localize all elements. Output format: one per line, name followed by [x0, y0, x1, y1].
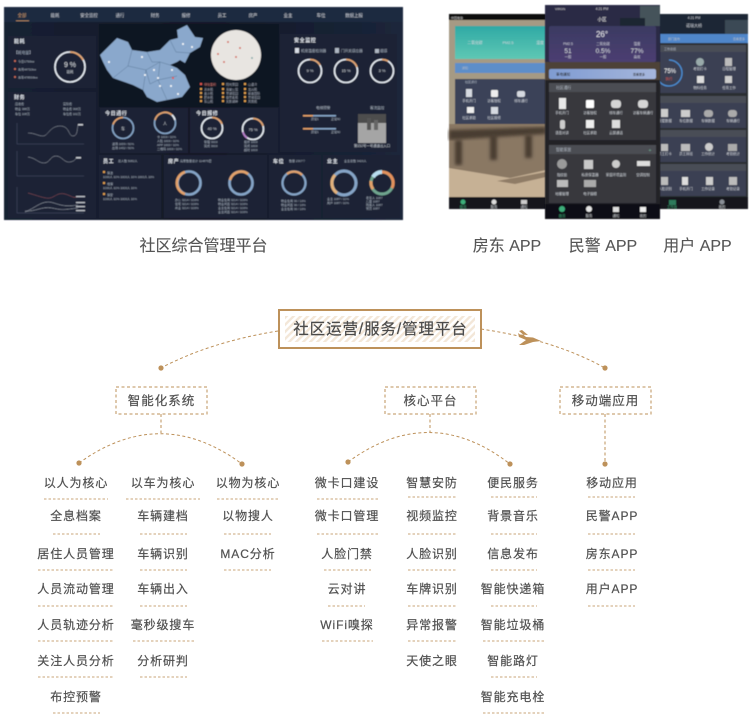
panel: safety monitoring: 3 % [379, 68, 386, 73]
panel: today's repairs: 完成 3000 [204, 143, 218, 148]
panel: property: 物业闲置 3214 / 100% [218, 201, 248, 206]
records card: 手机开门 [679, 186, 693, 191]
map legend: 阳光家园 [226, 82, 238, 86]
panel: owners: 残疾人 1087 [366, 202, 383, 207]
community access panel: 手机开门 [555, 110, 569, 115]
panel: property: 住宅 3214 / 100% [175, 201, 199, 206]
category: core platform: 核心平台 [403, 393, 458, 408]
column: resident services: 智能充电栓 [481, 689, 545, 704]
panel: safety monitoring: 机房温度检测器 [301, 48, 327, 53]
white circular mini map [211, 30, 261, 80]
service card: 考勤统计 [726, 151, 740, 156]
smart home panel: 电子猫眼 [583, 191, 597, 196]
work card with progress ring: 任务工作 [722, 85, 736, 90]
connector: core platform branches [345, 414, 513, 467]
panel: property: 物业在用 3214 / 100% [218, 197, 248, 202]
captions: apps: 民警 APP [569, 237, 637, 255]
column: people-centred: 人员轨迹分析 [37, 618, 115, 632]
panel: safety monitoring: 9 % [307, 68, 314, 73]
panel: staff: 1000人 10% 1000人 10% [103, 186, 137, 190]
panel: today's traffic [100, 108, 188, 153]
panel: owners: 业主总数 3420人 [344, 158, 367, 163]
weather card: 77% [630, 48, 644, 55]
phone: user app [655, 14, 748, 209]
panel: finance with three line charts: 车位 108万 [15, 111, 30, 116]
panel: property: 商业 3214 / 100% [175, 205, 199, 210]
bottom navigation: 我的 [640, 213, 647, 218]
map legend: 东山苑 [204, 98, 213, 104]
bottom navigation [449, 197, 546, 209]
weather card [549, 26, 656, 62]
staff card: 车辆数据 [701, 118, 715, 123]
blue notice bar [660, 34, 748, 43]
bottom navigation: 通知 [613, 213, 620, 218]
navigation tabs: 房产 [249, 12, 258, 19]
staff card: 房屋数据 [658, 118, 672, 123]
map legend: 山语湾 [248, 82, 257, 86]
weather card: 26° [596, 30, 608, 39]
bottom navigation: 服务 [586, 213, 593, 218]
community access panel: 绑车通行 [609, 110, 623, 115]
community access panel [549, 83, 656, 140]
column: vehicle-centred: 车辆出入 [137, 581, 189, 596]
panel: today's traffic: 进场 1659 / 50% [112, 141, 134, 146]
weather card: 51 [564, 48, 572, 55]
column: micro checkpoint: WiFi嗅探 [320, 618, 374, 632]
staff card: 车辆通行 [726, 118, 740, 123]
staff card: 车位数据 [679, 118, 693, 123]
panel: today's traffic: 今日通行 [105, 110, 127, 117]
phone: user app: 4:21 PM [688, 16, 700, 20]
alert notice bar: 事电通知 [556, 72, 571, 76]
bottom navigation: 通知 [521, 204, 528, 209]
panel: owners: 业主 1087 / 10% [327, 196, 349, 201]
panel: parking: 物业闲置 30 / 10% [281, 202, 306, 207]
panel: finance with three line charts: 财务 [14, 94, 25, 101]
weather card: PM2.5 [563, 42, 573, 46]
map legend: 绿化面积 [204, 82, 216, 86]
panel: safety monitoring: 异常1 [311, 129, 319, 134]
column: people-centred: 居住人员管理 [37, 546, 115, 561]
smart home panel: 私房保温器 [582, 172, 599, 177]
column: smart security: 天使之眼 [406, 653, 458, 668]
panel: owners [323, 155, 400, 218]
panel: energy: 本月44710kw [18, 66, 37, 72]
panel: today's traffic: 人 [163, 121, 167, 126]
column: vehicle-centred [126, 475, 200, 677]
map legend: 翠湖花园 [226, 90, 238, 96]
panel: owners: 儿童 1087 [366, 198, 380, 204]
interior photo [449, 124, 546, 198]
records card: 工作记录 [701, 186, 715, 191]
column: resident services: 智能垃圾桶 [481, 617, 545, 632]
column: object-centred: MAC分析 [220, 547, 276, 561]
community access panel: 语音对讲 [555, 130, 569, 135]
bottom navigation: 工作台 [667, 204, 678, 209]
captions: apps [473, 237, 732, 255]
panel: today's repairs: 超时 1000 [244, 147, 258, 152]
column: object-centred: 以物为核心 [216, 476, 280, 490]
column: smart security: 车牌识别 [406, 581, 458, 596]
panel: staff: 保安 [107, 192, 113, 197]
bottom navigation: 首页 [460, 204, 467, 209]
work card with progress ring: 考勤打卡 [693, 66, 707, 71]
panel: parking: 车位 [273, 158, 284, 165]
connector: smart systems branches [76, 414, 245, 467]
column: micro checkpoint: 微卡口管理 [315, 508, 379, 523]
column: resident services: 便民服务 [487, 475, 539, 490]
smart home panel [549, 145, 656, 203]
weather card: 0.5% [596, 48, 611, 55]
panel: finance with three line charts: 应收费 [15, 101, 24, 106]
bottom navigation [655, 197, 748, 209]
column: resident services: 智能快递箱 [481, 581, 545, 596]
panel: property: 房屋数量总计 114875套 [180, 158, 212, 163]
air quality card: 二氧化碳 [467, 40, 483, 45]
panel: owners: 老年人 1087 [366, 195, 383, 200]
panel: energy: 今日1750kw [18, 58, 35, 64]
column: micro checkpoint: 微卡口建设 [315, 476, 379, 490]
navigation tabs: 通行 [116, 12, 125, 19]
community access card: 社区报修 [487, 115, 501, 120]
community access card: 手机开门 [462, 98, 476, 103]
panel: safety monitoring: 正常90 [331, 116, 341, 121]
column: object-centred [216, 476, 280, 570]
work card with progress ring: 日程管理 [722, 66, 736, 71]
panel: today's repairs [190, 108, 278, 153]
blue notice bar: 部门发布 [668, 36, 680, 41]
column: vehicle-centred: 毫秒级搜车 [131, 617, 195, 632]
panel: staff: 总人数 5082人 [118, 158, 138, 163]
panel: finance with three line charts [8, 92, 96, 218]
column: mobile apps [586, 475, 638, 606]
panel: safety monitoring: 烟感 [380, 48, 388, 53]
navigation tabs: 报修 [182, 12, 191, 19]
alert notice bar [549, 69, 656, 79]
map legend: 龙兴苑 [248, 86, 257, 92]
column: smart security: 人脸识别 [406, 547, 458, 561]
map legend: 海棠公馆 [226, 86, 238, 92]
panel: finance with three line charts: 物业 388万 [15, 106, 30, 111]
navigation tabs: 业主 [284, 12, 293, 18]
panel: safety monitoring: 门开关感应器 [341, 48, 363, 53]
dashboard screenshot: community management platform [4, 7, 403, 220]
panel: today's traffic: 出场 1432 / 50% [112, 145, 134, 150]
column: mobile apps: 用户APP [586, 581, 638, 596]
map legend: 金沙苑 [204, 90, 213, 96]
notice bar [455, 63, 546, 73]
community access panel: 社区求助 [583, 130, 597, 135]
panel: safety monitoring: 客流监控 [370, 105, 385, 110]
navigation tabs: 数据上报 [345, 12, 363, 19]
category: core platform [385, 387, 476, 414]
column: smart security: 异常报警 [406, 617, 458, 632]
column: people-centred [37, 476, 115, 713]
smart home panel: 地暖管理 [555, 191, 569, 196]
community access card: 社区通行 [465, 79, 477, 84]
phone: police app [545, 5, 660, 219]
column: people-centred: 关注人员分析 [37, 653, 115, 668]
captions: apps: 房东 APP [473, 237, 541, 255]
map of China with province lines [99, 24, 279, 107]
dashed arc to smart systems [158, 331, 278, 371]
column: resident services: 信息发布 [487, 546, 539, 561]
phone: police app: 小区 [598, 16, 607, 23]
phone: police app: 4:21 PM [596, 7, 608, 11]
panel: safety monitoring: 电梯预警 [316, 105, 331, 110]
column: smart security: 视频监控 [406, 508, 458, 523]
panel: staff: 员工 [103, 158, 114, 165]
title box: community platform [279, 310, 481, 348]
panel: safety monitoring: 安全监控 [294, 37, 316, 44]
weather card: 一般 [600, 54, 607, 59]
records card: 人脸识别 [658, 186, 672, 191]
panel: today's repairs: 40 % [207, 126, 217, 131]
panel: energy [8, 36, 96, 88]
map legend: 凤凰苑 [248, 98, 257, 104]
panel: staff: 1000人 10% 1000人 10% [103, 197, 137, 201]
navigation tabs: 全部 [18, 12, 27, 19]
phone: landlord app [449, 14, 546, 209]
panel: staff [99, 155, 161, 218]
panel: today's repairs: 完成 1000 [244, 143, 258, 148]
panel: safety monitoring: 异常1 [311, 116, 319, 121]
column: vehicle-centred: 车辆建档 [137, 508, 189, 523]
panel: energy: 能耗 [67, 69, 74, 74]
column: micro checkpoint: 云对讲 [328, 581, 366, 596]
panel: today's traffic: 二维码 1000 / 10% [157, 146, 182, 151]
column: object-centred: 以物搜人 [222, 508, 274, 523]
panel: finance with three line charts: 物业费 368万 [63, 106, 81, 111]
navigation tabs: 车位 [317, 12, 326, 19]
air quality card [455, 26, 546, 59]
column: mobile apps: 移动应用 [586, 475, 638, 490]
navigation tabs [4, 7, 403, 22]
panel: property: 办公 3214 / 100% [175, 197, 199, 202]
panel: finance with three line charts: 车位费 102万 [63, 111, 81, 116]
panel: energy: 9 % [64, 62, 76, 69]
navigation tabs: 能耗 [51, 12, 60, 19]
panel: today's traffic: 车 [121, 125, 125, 131]
icon: airplane [518, 330, 541, 345]
captions: apps: 用户 APP [663, 237, 732, 255]
panel: today's repairs: 报修 1000 [244, 139, 258, 144]
column: smart security [406, 475, 458, 668]
bottom navigation: 首页 [559, 213, 566, 218]
service card: 工作统计 [701, 151, 715, 156]
panel: energy: 能耗 [14, 38, 25, 45]
alert notice bar: 查看更多 [633, 72, 645, 76]
column: resident services [481, 475, 545, 713]
category: mobile apps: 移动端应用 [572, 393, 639, 408]
category: mobile apps [560, 387, 651, 414]
records card [658, 164, 746, 196]
panel: safety monitoring [280, 34, 397, 152]
panel: today's repairs: 今日报修 [196, 110, 218, 117]
panel: today's repairs: 受理 3000 [204, 139, 218, 144]
phone: landlord app: 中国电信 [451, 15, 463, 20]
column: mobile apps: 民警APP [586, 508, 638, 523]
smart home panel: 智能家居 [556, 147, 571, 152]
column: vehicle-centred: 以车为核心 [131, 475, 195, 490]
smart home panel: 空调控制 [636, 172, 650, 177]
community access card: 社区求助 [462, 115, 476, 120]
panel: property [164, 155, 267, 218]
community access panel: 社区通行 [556, 85, 571, 90]
panel: owners: 党员 1087 [366, 206, 380, 210]
work card with progress ring: 工作总结 [664, 46, 676, 51]
blue notice bar: 查看更多 [733, 36, 745, 41]
work card with progress ring: 75% [664, 69, 677, 75]
panel: parking: 业主在用 30 / 10% [281, 206, 306, 211]
panel: owners: 业主 [327, 158, 338, 165]
weather card: 一般 [565, 54, 572, 59]
column: resident services: 背景音乐 [487, 508, 539, 523]
column: mobile apps: 房东APP [586, 546, 638, 561]
map legend: 紫金国际 [248, 90, 260, 96]
smart home panel: + [649, 148, 652, 154]
navigation tabs: 员工 [218, 13, 227, 19]
panel: energy: 【耗电量】 [14, 50, 33, 55]
navigation tabs: 财务 [151, 12, 160, 19]
connector: mobile branch [602, 414, 608, 467]
panel: owners: 用户 1087 / 10% [327, 200, 349, 205]
map legend: 景城花园 [248, 94, 260, 100]
panel: staff: 保洁 [107, 170, 113, 175]
panel: parking [269, 155, 321, 218]
panel: property: 业主闲置 3214 / 100% [218, 209, 248, 214]
records card: 考勤记录 [726, 186, 740, 191]
category: smart systems: 智能化系统 [128, 393, 195, 408]
column: vehicle-centred: 分析研判 [137, 654, 189, 668]
column: smart security: 智慧安防 [406, 475, 458, 490]
panel: energy: 本年478590kw [18, 74, 39, 80]
panel: parking: 物业在用 30 / 10% [281, 198, 306, 203]
smart home panel: 指纹锁 [557, 172, 568, 177]
air quality card: PM2.5 [503, 41, 513, 45]
navigation tabs: 安全监控 [80, 12, 98, 19]
caption: dashboard: 社区综合管理平台 [139, 237, 268, 255]
map legend: 天鹅湖畔 [226, 98, 238, 104]
panel: today's traffic: 人脸 1000 / 10% [157, 138, 179, 143]
community access panel: 访客车辆通行 [633, 110, 654, 115]
panel: property: 房产 [168, 158, 179, 165]
bottom navigation: 服务 [491, 204, 498, 209]
panel: safety monitoring: 正常90 [331, 129, 341, 134]
dashed arc to mobile apps [481, 329, 608, 371]
community access card: 访客授权 [487, 98, 501, 103]
phone: police app: VIRGIN [555, 7, 565, 11]
panel: staff: 维保 [107, 181, 113, 186]
smart home panel: 家庭环境监测 [606, 172, 627, 177]
panel: staff: 1000人 10% 1000人 10% 1000人 10% [103, 175, 155, 179]
column: micro checkpoint [315, 476, 379, 641]
panel: safety monitoring: 第152号一号通道出入口 [354, 143, 390, 148]
bottom navigation: 我的 [719, 204, 726, 209]
title box: community platform: 社区运营/服务/管理平台 [293, 320, 468, 338]
map legend: 御景名苑 [226, 94, 238, 100]
column: people-centred: 人员流动管理 [37, 581, 115, 596]
weather card: 二氧化碳 [596, 41, 610, 46]
community access panel: 云屏通话 [609, 130, 623, 135]
work card with progress ring: 执行 [666, 76, 673, 81]
panel: today's traffic: APP 1000 / 10% [157, 143, 179, 147]
column: vehicle-centred: 车辆识别 [137, 546, 189, 561]
panel: finance with three line charts: 实际费 [63, 101, 72, 106]
category: smart systems [116, 387, 207, 414]
community access card: 绑车通行 [514, 98, 528, 103]
panel: parking: 数量 2367个 [289, 158, 306, 163]
weather card: 喜欢 [634, 54, 641, 59]
service card: 员工排班 [679, 151, 693, 156]
map legend [200, 82, 260, 104]
community access card [455, 79, 546, 124]
bottom navigation [545, 204, 660, 219]
work card with progress ring [656, 45, 746, 93]
service card: 员工打卡 [658, 151, 672, 156]
weather card: 湿度 [634, 41, 641, 46]
service card [658, 130, 746, 162]
panel: today's repairs: 75 % [248, 127, 258, 132]
column: people-centred: 布控预警 [50, 689, 102, 704]
map legend: 碧水苑 [204, 94, 213, 100]
phone: user app: 诺瑞大桥 [686, 22, 702, 28]
work card with progress ring: 物料任务 [693, 85, 707, 90]
column: micro checkpoint: 人脸门禁 [321, 546, 373, 561]
notice bar: 通知 [462, 65, 468, 70]
air quality card: 湿度 [536, 40, 544, 45]
panel: property: 业主在用 3214 / 100% [218, 205, 248, 210]
column: people-centred: 全息档案 [50, 508, 102, 523]
panel: today's traffic: 卡 1000 / 10% [157, 134, 176, 139]
map legend: 清水苑 [204, 86, 213, 92]
panel: safety monitoring: 15 % [341, 68, 351, 73]
column: resident services: 智能路灯 [487, 653, 539, 668]
column: people-centred: 以人为核心 [44, 476, 108, 490]
staff card [658, 96, 746, 128]
community access panel: 访客授权 [583, 110, 597, 115]
